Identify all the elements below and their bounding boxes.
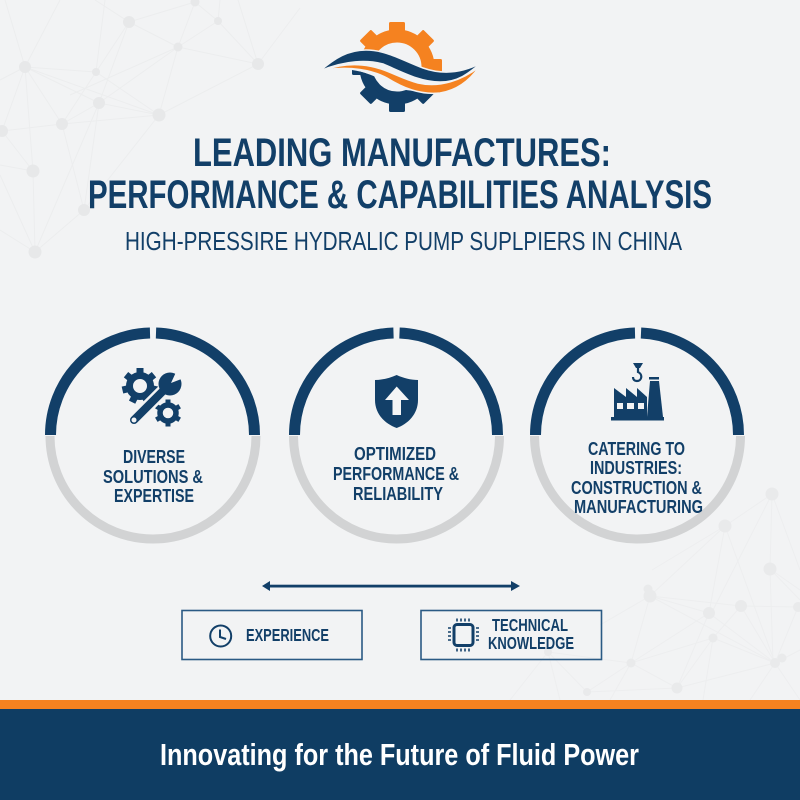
title: LEADING MANUFACTURES:: [193, 131, 611, 175]
icon: chip: [448, 618, 479, 652]
title: [88, 131, 712, 217]
label: [103, 447, 203, 506]
icon: clock: [210, 626, 231, 646]
icon: factory and crane hook: [611, 363, 664, 420]
panel: diverse solutions: [50, 333, 256, 539]
label: CATERING TO: [588, 439, 685, 459]
label: PERFORMANCE &: [333, 464, 459, 484]
background network: top left: [0, 0, 300, 258]
arrow: double-headed: [262, 581, 520, 591]
label: [488, 615, 574, 653]
label: [333, 444, 459, 504]
label: SOLUTIONS &: [103, 467, 203, 487]
icon: gears and wrench: [122, 364, 184, 426]
label: CONSTRUCTION &: [571, 478, 702, 498]
label: EXPERIENCE: [246, 625, 329, 645]
logo: gear with waves: [320, 22, 481, 112]
progress ring: [534, 333, 740, 539]
label: KNOWLEDGE: [488, 633, 574, 653]
label: INDUSTRIES:: [590, 458, 682, 478]
label: RELIABILITY: [353, 484, 443, 504]
label: [571, 439, 703, 517]
box: experience: [182, 610, 362, 660]
progress ring: [294, 333, 500, 539]
progress ring: [50, 333, 256, 539]
label: EXPERTISE: [114, 486, 194, 506]
footer text: Innovating for the Future of Fluid Power: [160, 737, 639, 772]
label: TECHNICAL: [492, 615, 568, 635]
panel: catering to industries: [534, 333, 740, 539]
background network: bottom right: [510, 488, 800, 700]
box: technical knowledge: [421, 610, 602, 660]
footer band: [0, 700, 800, 800]
panel: optimized performance: [294, 333, 500, 539]
label: MANUFACTURING: [574, 497, 703, 517]
label: OPTIMIZED: [354, 444, 436, 464]
label: DIVERSE: [123, 447, 185, 467]
icon: shield with arrow: [375, 375, 418, 428]
